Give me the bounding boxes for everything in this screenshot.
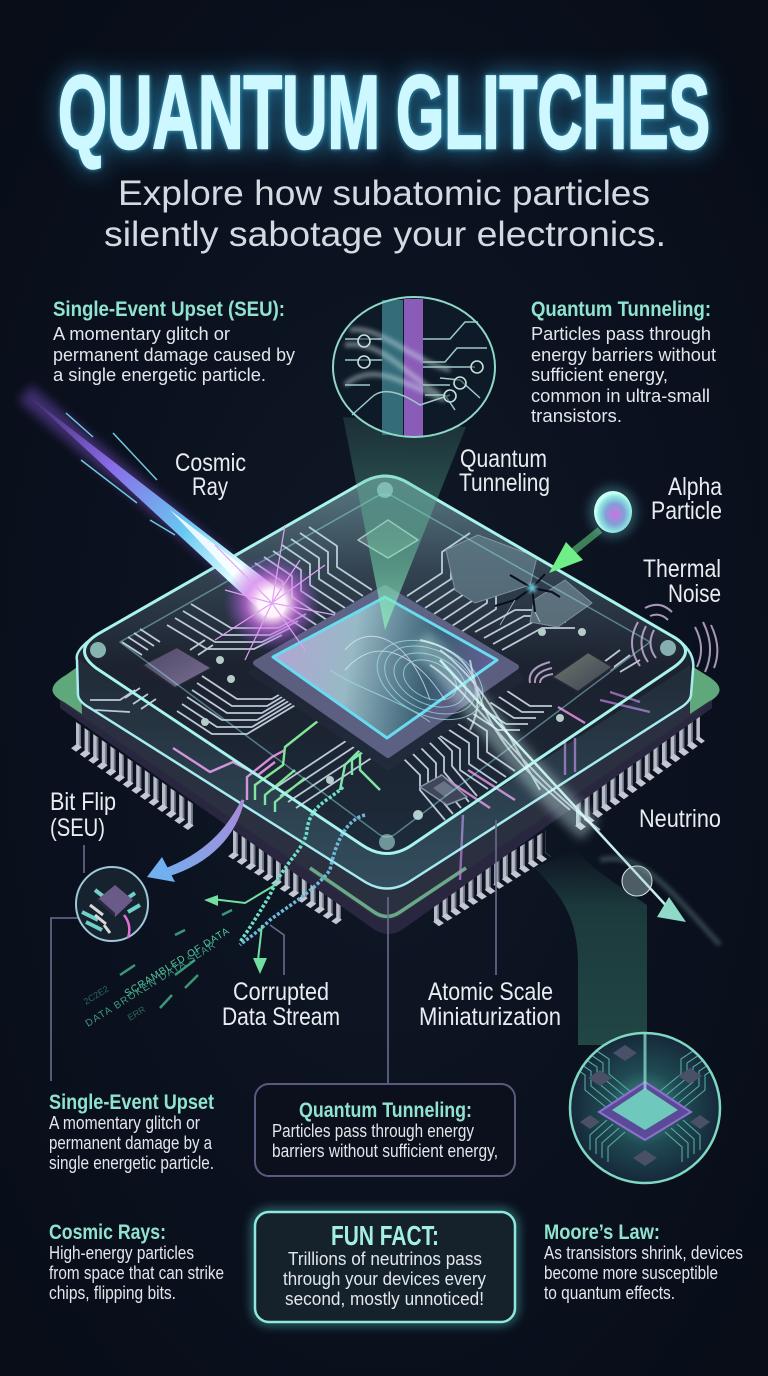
text block: Cosmic Rays: chips, flipping bits. — [49, 1282, 176, 1303]
corrupted data stream — [82, 787, 365, 1030]
pink and green signal traces — [173, 692, 650, 880]
diagram labels: (SEU) — [50, 814, 105, 842]
diagram labels: Data Stream — [222, 1003, 340, 1031]
text block: Single-Event Upset lower: Single-Event Upset — [49, 1091, 214, 1114]
diagram labels: Alpha — [668, 473, 722, 501]
text block: Single-Event Upset lower: permanent damage by a — [49, 1132, 213, 1153]
small chips — [142, 520, 613, 820]
glass lid — [77, 476, 693, 888]
magnifier: miniaturized chip — [570, 1033, 720, 1183]
diagram labels: Cosmic — [175, 449, 246, 477]
text block: Moore's Law: to quantum effects. — [544, 1282, 675, 1303]
text block: Single-Event Upset (SEU): A momentary glitch or — [53, 323, 230, 344]
text block: Quantum Tunneling: common in ultra-small — [531, 385, 710, 406]
text block: Quantum Tunneling: Quantum Tunneling: — [531, 298, 711, 321]
text block: Single-Event Upset (SEU) — [53, 298, 296, 385]
text block: Moore's Law — [544, 1221, 743, 1303]
base top — [54, 476, 718, 920]
blue curved arrow to bit flip — [147, 800, 243, 882]
text block: Cosmic Rays — [49, 1221, 224, 1303]
text block: Single-Event Upset lower — [49, 1091, 214, 1173]
alpha particle with arrow — [549, 486, 637, 573]
diagram labels — [50, 445, 722, 1031]
plate — [256, 588, 516, 755]
text block: Single-Event Upset lower: single energetic particle. — [49, 1152, 214, 1173]
panel: fun fact: FUN FACT: — [331, 1220, 439, 1251]
chip pins — [74, 726, 702, 924]
thermal noise waves — [530, 605, 717, 683]
lid top face edge — [84, 476, 686, 854]
panel: Quantum Tunneling box: Particles pass through energy — [272, 1120, 475, 1141]
text block: Quantum Tunneling: Particles pass through — [531, 323, 711, 344]
panel: fun fact — [255, 1212, 515, 1322]
text block: Cosmic Rays: High-energy particles — [49, 1242, 194, 1263]
corrupted data stream: DATA BROKEN DATA SEAR — [84, 940, 218, 1030]
chip base — [52, 476, 720, 934]
bit flip magnifier — [76, 867, 148, 941]
diagram labels: Ray — [192, 473, 228, 501]
diagram labels: Tunneling — [459, 469, 550, 497]
text block: Quantum Tunneling: transistors. — [531, 405, 622, 426]
traces — [90, 527, 640, 820]
beam: teal band from neutrino to lower circle — [535, 850, 647, 1045]
panel: Quantum Tunneling box: Quantum Tunneling: — [299, 1099, 472, 1122]
subtitle — [104, 174, 666, 254]
lid side faces — [78, 660, 691, 888]
text block: Cosmic Rays: from space that can strike — [49, 1262, 224, 1283]
subtitle: silently sabotage your electronics. — [104, 215, 666, 254]
text block: Moore's Law: Moore’s Law: — [544, 1221, 660, 1244]
panel: fun fact: Trillions of neutrinos pass — [288, 1248, 482, 1269]
text block: Quantum Tunneling — [531, 298, 716, 426]
leader lines — [51, 820, 496, 1084]
diagram labels: Quantum — [460, 445, 547, 473]
diagram labels: Noise — [668, 580, 721, 608]
corrupted data stream: SCRAMBLED OF DATA — [123, 926, 231, 1000]
title: Quantum Glitches: QUANTUM — [58, 55, 380, 171]
panel: fun fact: second, mostly unnoticed! — [285, 1288, 484, 1309]
text block: Cosmic Rays: Cosmic Rays: — [49, 1221, 166, 1244]
panel: fun fact: through your devices every — [283, 1268, 487, 1289]
lid body — [77, 476, 693, 888]
panel: Quantum Tunneling box — [255, 1084, 515, 1176]
diagram labels: Neutrino — [639, 805, 721, 833]
text block: Single-Event Upset lower: A momentary glitch or — [49, 1112, 200, 1133]
plate shadow side — [253, 600, 520, 766]
cone: tunneling magnifier beam — [343, 417, 466, 630]
diagram labels: Atomic Scale — [428, 978, 553, 1006]
text block: Quantum Tunneling: sufficient energy, — [531, 364, 668, 385]
diagram labels: Particle — [651, 497, 722, 525]
diagram labels: Thermal — [643, 555, 721, 583]
central processor — [253, 588, 520, 766]
cosmic ray — [25, 393, 335, 660]
circuit board under glass — [77, 476, 693, 888]
diagram labels: Miniaturization — [419, 1003, 561, 1031]
text block: Single-Event Upset (SEU): permanent damage caused by — [53, 344, 296, 365]
text block: Moore's Law: become more susceptible — [544, 1262, 718, 1283]
surface — [273, 597, 497, 738]
text block: Single-Event Upset (SEU): Single-Event Upset (SEU): — [53, 298, 285, 321]
green rim corners — [52, 665, 82, 714]
subtitle: Explore how subatomic particles — [118, 174, 650, 213]
text block: Quantum Tunneling: energy barriers without — [531, 344, 716, 365]
corrupted data stream: ERR — [126, 1004, 148, 1023]
title: Quantum Glitches: QUANTUM — [58, 55, 380, 171]
text block: Single-Event Upset (SEU): a single energetic particle. — [53, 364, 266, 385]
corrupted data stream: 2C2E2 — [82, 984, 110, 1007]
title: Quantum Glitches: QUANTUM — [58, 55, 380, 171]
base underside — [60, 690, 712, 934]
swirl lines — [330, 625, 496, 735]
magnifier: tunneling close-up — [333, 297, 495, 437]
diagram labels: Bit Flip — [50, 788, 116, 816]
panel: Quantum Tunneling box: barriers without sufficient energy, — [272, 1140, 498, 1161]
crack in the glass — [495, 574, 560, 625]
diagram labels: Corrupted — [233, 978, 329, 1006]
neutrino path and arrow — [420, 640, 720, 945]
